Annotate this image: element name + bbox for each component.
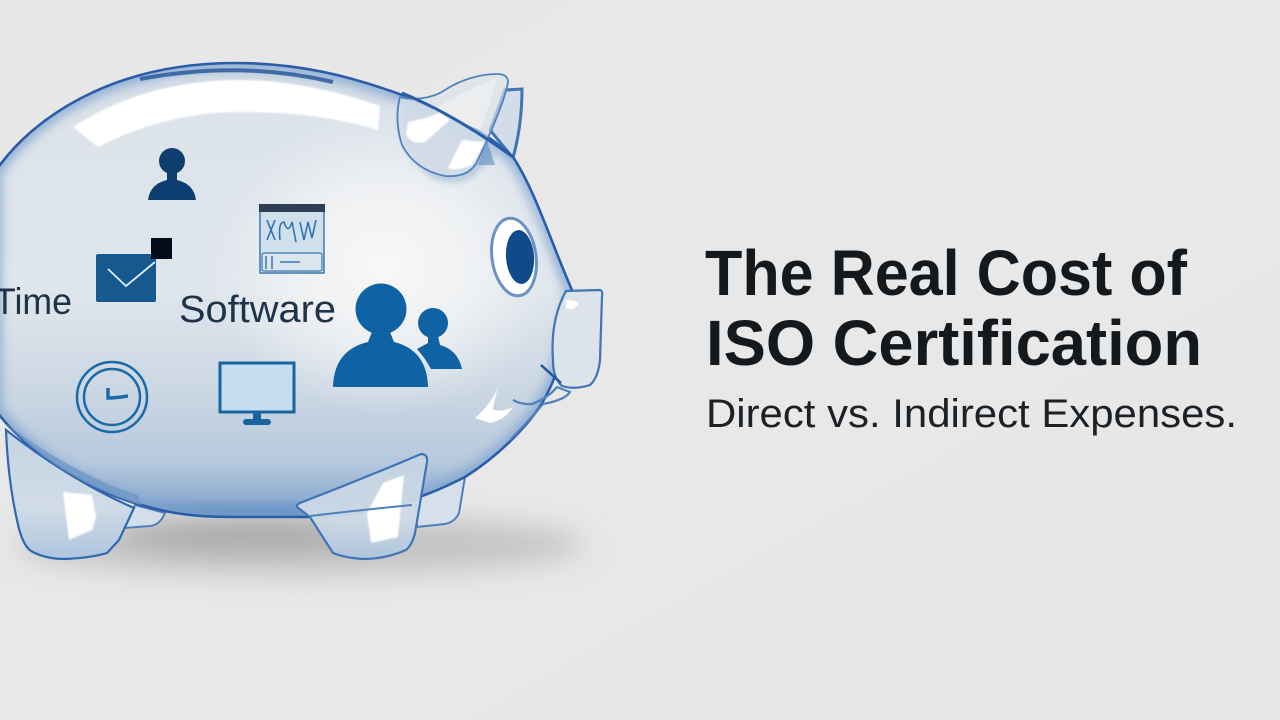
body outline	[0, 63, 572, 517]
snout	[510, 290, 602, 440]
near front leg	[297, 454, 427, 559]
near ear	[397, 74, 513, 183]
icon: envelope with check	[96, 238, 172, 302]
eye	[487, 215, 541, 299]
body	[0, 63, 572, 517]
far ear	[490, 89, 522, 158]
top rim	[140, 70, 333, 82]
label: software: Software	[179, 289, 336, 331]
piggy bank	[0, 63, 602, 559]
inner white glow	[210, 115, 560, 415]
title: The Real Cost of	[705, 237, 1188, 309]
far legs	[124, 477, 465, 528]
near back leg	[6, 423, 141, 559]
inner edge shading	[0, 63, 572, 517]
title	[705, 237, 1202, 379]
infographic canvas	[0, 62, 1234, 586]
title: ISO Certification	[706, 307, 1202, 379]
subtitle: Direct vs. Indirect Expenses.	[706, 392, 1237, 436]
floor shadow	[15, 515, 585, 575]
icon: software window	[259, 204, 325, 273]
icon: clock	[77, 362, 147, 432]
mouth highlight	[475, 388, 513, 423]
icon: monitor	[220, 363, 294, 425]
top highlight	[73, 80, 380, 147]
icon: small person	[148, 148, 196, 200]
icon: people	[333, 284, 462, 387]
